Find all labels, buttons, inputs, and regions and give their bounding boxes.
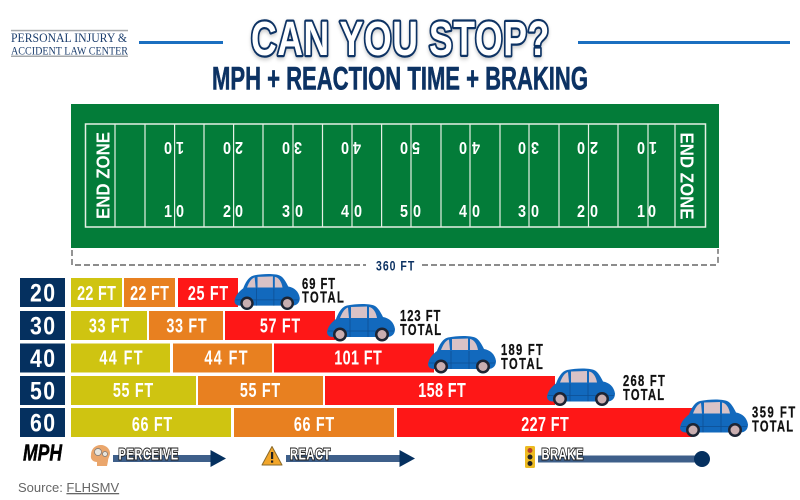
row: 60 mph: 66 FT xyxy=(294,413,334,436)
yard numbers top, inverted: 0 xyxy=(223,138,231,157)
arrow xyxy=(286,455,400,462)
row: 50 mph: 268 FT xyxy=(623,372,665,389)
yard numbers bottom xyxy=(164,202,656,221)
yard numbers top, inverted: 0 xyxy=(282,138,290,157)
row: 30 mph: 123 FT xyxy=(400,307,441,324)
row: 40 mph: 189 FT xyxy=(501,341,543,358)
360 ft dimension bracket: 360 FT xyxy=(376,258,415,274)
row: 50 mph: TOTAL xyxy=(623,386,664,403)
end zone right: END ZONE xyxy=(676,132,696,220)
legend: react xyxy=(262,446,415,467)
row: 20 mph xyxy=(20,274,344,310)
row: 60 mph: 66 FT xyxy=(132,413,172,436)
row: 40 mph: TOTAL xyxy=(501,355,543,372)
row: 40 mph: 101 FT xyxy=(334,346,382,369)
logo: Personal Injury & Accident Law Center: ACCIDENT LAW CENTER xyxy=(11,44,128,58)
row: 50 mph: 50 xyxy=(30,377,55,405)
row: 50 mph xyxy=(20,368,665,406)
row: 40 mph: 40 xyxy=(30,344,55,372)
legend: brake: BRAKE xyxy=(542,446,583,463)
icon: traffic light xyxy=(525,446,535,468)
row: 30 mph: TOTAL xyxy=(400,321,441,338)
yard numbers bottom: 5 xyxy=(400,202,408,221)
yard numbers top, inverted: 0 xyxy=(518,138,526,157)
yard numbers top, inverted: 0 xyxy=(341,138,349,157)
yard numbers bottom: 1 xyxy=(637,202,645,221)
row: 40 mph: 44 FT xyxy=(204,346,248,369)
title rule left xyxy=(139,41,223,44)
yard numbers top, inverted: 3 xyxy=(531,138,539,157)
row: 60 mph: 227 FT xyxy=(521,413,569,436)
yard numbers top, inverted: 0 xyxy=(400,138,408,157)
row: 60 mph: TOTAL xyxy=(752,418,793,435)
yard numbers bottom: 0 xyxy=(235,202,243,221)
subtitle: MPH + REACTION TIME + BRAKING xyxy=(212,60,588,96)
row: 40 mph: 44 FT xyxy=(99,346,143,369)
yard numbers top, inverted: 0 xyxy=(164,138,172,157)
row: 30 mph xyxy=(20,304,441,342)
row: 30 mph: 33 FT xyxy=(89,314,129,337)
yard numbers top, inverted: 2 xyxy=(590,138,598,157)
yard numbers bottom: 0 xyxy=(413,202,421,221)
row: 20 mph: TOTAL xyxy=(302,289,344,306)
football field xyxy=(71,104,719,248)
end zone left: END ZONE xyxy=(94,132,114,219)
yard numbers bottom: 4 xyxy=(459,202,467,221)
yard numbers bottom: 3 xyxy=(282,202,290,221)
yard numbers bottom: 3 xyxy=(518,202,526,221)
logo: Personal Injury & Accident Law Center: PERSONAL INJURY & xyxy=(11,30,127,45)
yard numbers bottom: 2 xyxy=(223,202,231,221)
yard numbers top, inverted: 2 xyxy=(235,138,243,157)
row: 30 mph: 57 FT xyxy=(260,314,300,337)
row: 40 mph xyxy=(20,336,543,374)
row: 60 mph: 359 FT xyxy=(752,404,796,421)
yard numbers top, inverted: 0 xyxy=(637,138,645,157)
yard numbers top, inverted xyxy=(164,138,657,157)
yard numbers bottom: 0 xyxy=(176,202,184,221)
row: 60 mph: 60 xyxy=(30,409,55,437)
bar with end dot xyxy=(538,456,698,462)
360 ft dimension bracket xyxy=(72,249,718,274)
yard numbers bottom: 2 xyxy=(577,202,585,221)
yard numbers top, inverted: 1 xyxy=(649,138,657,157)
title: CAN YOU STOP? xyxy=(251,12,549,65)
row: 50 mph: 55 FT xyxy=(240,379,280,402)
row: 50 mph: 55 FT xyxy=(113,379,153,402)
yard numbers bottom: 0 xyxy=(590,202,598,221)
yard numbers bottom: 0 xyxy=(354,202,362,221)
source: Source: FLHSMV xyxy=(18,480,119,495)
yard numbers top, inverted: 4 xyxy=(353,138,361,157)
yard numbers bottom: 0 xyxy=(648,202,656,221)
yard numbers top, inverted: 5 xyxy=(412,138,420,157)
yard numbers top, inverted: 1 xyxy=(176,138,184,157)
legend: brake xyxy=(525,446,710,468)
yard numbers bottom: 0 xyxy=(295,202,303,221)
row: 30 mph: 33 FT xyxy=(166,314,207,337)
legend: react: REACT xyxy=(290,446,331,463)
row: 20 mph: 25 FT xyxy=(188,282,228,305)
row: 50 mph: 158 FT xyxy=(418,379,466,402)
row: 20 mph: 69 FT xyxy=(302,275,336,292)
yard numbers top, inverted: 0 xyxy=(577,138,585,157)
yard numbers bottom: 0 xyxy=(472,202,480,221)
logo: Personal Injury & Accident Law Center xyxy=(11,30,128,58)
yard numbers bottom: 4 xyxy=(341,202,349,221)
row: 30 mph: 30 xyxy=(30,312,55,340)
arrow xyxy=(113,455,211,462)
row: 20 mph: 22 FT xyxy=(130,282,169,305)
row: 20 mph: 20 xyxy=(30,279,55,307)
yard numbers top, inverted: 3 xyxy=(294,138,302,157)
axis label: MPH: MPH xyxy=(23,440,62,466)
yard numbers top, inverted: 0 xyxy=(459,138,467,157)
row: 20 mph: 22 FT xyxy=(77,282,116,305)
icon: head xyxy=(91,445,110,466)
legend: perceive xyxy=(91,445,226,467)
icon: warning triangle xyxy=(262,446,282,465)
row: 60 mph xyxy=(20,400,796,437)
yard numbers bottom: 1 xyxy=(164,202,172,221)
yard numbers bottom: 0 xyxy=(531,202,539,221)
yard numbers top, inverted: 4 xyxy=(472,138,480,157)
legend: perceive: PERCEIVE xyxy=(118,446,178,463)
title rule right xyxy=(578,41,790,44)
